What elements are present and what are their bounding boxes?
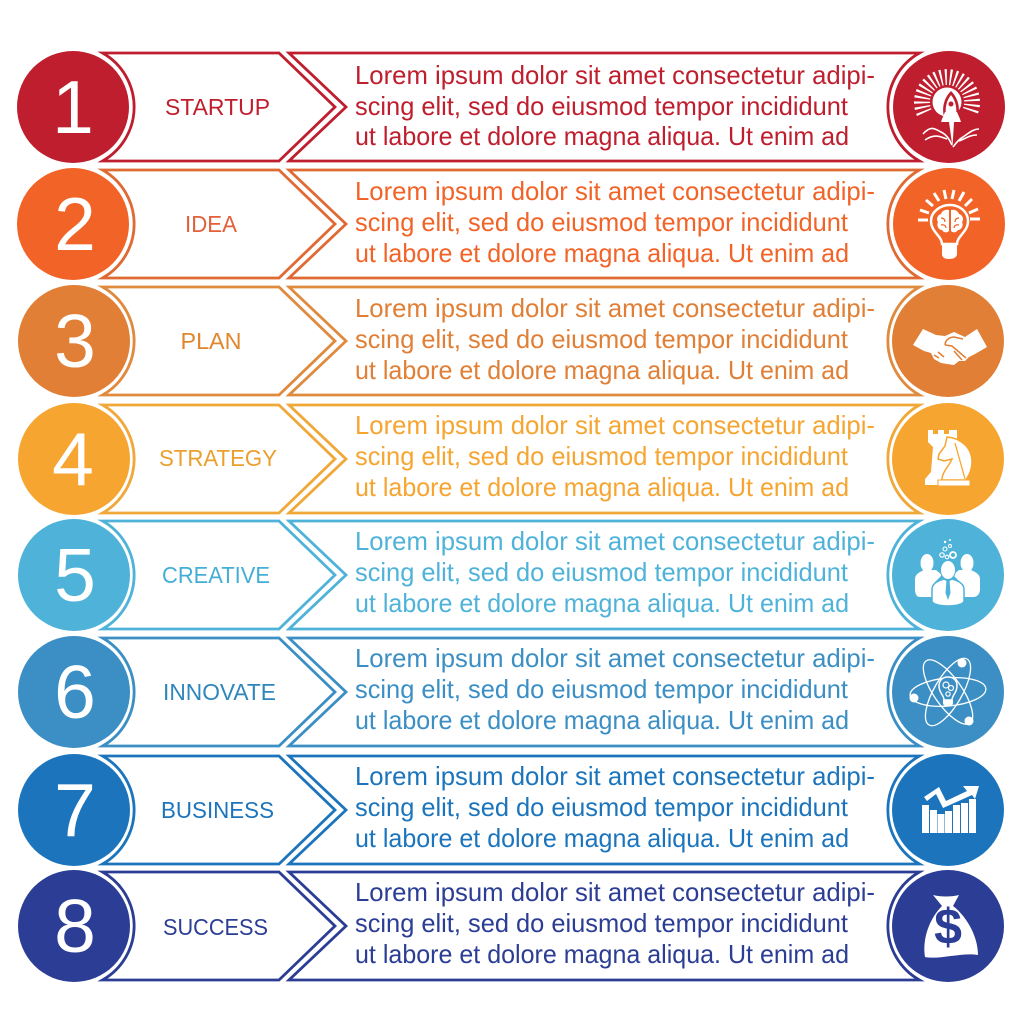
body text 5: scing elit, sed do eiusmod tempor incididunt bbox=[355, 557, 849, 587]
arrow frame: step 3 label bbox=[103, 287, 335, 395]
label: success: SUCCESS bbox=[163, 914, 268, 940]
number circle 7 bbox=[18, 754, 130, 866]
arrow frame: step 2 label bbox=[103, 170, 335, 278]
number 6: 6 bbox=[54, 650, 96, 734]
arrow frame: step 4 text bbox=[289, 405, 919, 513]
body text 7: scing elit, sed do eiusmod tempor incididunt bbox=[355, 792, 849, 822]
panel: step 3 plan bbox=[18, 285, 1004, 397]
icon circle 4 bbox=[892, 403, 1004, 515]
label: plan: PLAN bbox=[180, 328, 242, 354]
number 5: 5 bbox=[54, 533, 96, 617]
arrow frame: step 3 text bbox=[289, 287, 919, 395]
number circle 1 bbox=[17, 51, 129, 163]
arrow frame: step 8 label bbox=[103, 872, 335, 980]
body text 5: Lorem ipsum dolor sit amet consectetur adipi- bbox=[355, 526, 875, 556]
body text 1: scing elit, sed do eiusmod tempor incididunt bbox=[355, 91, 849, 121]
arrow frame: step 8 text bbox=[289, 872, 919, 980]
number 2: 2 bbox=[54, 182, 96, 266]
body text 4: ut labore et dolore magna aliqua. Ut enim ad bbox=[355, 472, 849, 502]
icon: atom with bulb bbox=[909, 652, 987, 732]
body text 4: scing elit, sed do eiusmod tempor incididunt bbox=[355, 441, 849, 471]
arrow frame: step 5 label bbox=[103, 521, 335, 629]
body text 3: ut labore et dolore magna aliqua. Ut enim ad bbox=[355, 355, 849, 385]
number circle 4 bbox=[18, 403, 130, 515]
icon circle 5 bbox=[892, 519, 1004, 631]
body text 6: ut labore et dolore magna aliqua. Ut enim ad bbox=[355, 705, 849, 735]
icon: money bag bbox=[924, 895, 978, 958]
label: creative: CREATIVE bbox=[162, 562, 270, 588]
number 7: 7 bbox=[54, 768, 96, 852]
icon circle 7 bbox=[892, 754, 1004, 866]
icon: light bulb with brain bbox=[918, 190, 980, 259]
arrow frame: step 5 text bbox=[289, 521, 919, 629]
label: idea: IDEA bbox=[185, 211, 238, 237]
panel: step 7 business bbox=[18, 754, 1004, 866]
number 4: 4 bbox=[52, 417, 94, 501]
icon circle 3 bbox=[892, 285, 1004, 397]
icon circle 1 bbox=[893, 51, 1005, 163]
arrow frame: step 4 label bbox=[103, 405, 335, 513]
arrow frame: step 1 label bbox=[103, 53, 335, 161]
body text 3: Lorem ipsum dolor sit amet consectetur adipi- bbox=[355, 293, 875, 323]
icon circle 8 bbox=[892, 870, 1004, 982]
body text 6: Lorem ipsum dolor sit amet consectetur adipi- bbox=[355, 643, 875, 673]
icon circle 6 bbox=[892, 636, 1004, 748]
body text 2: Lorem ipsum dolor sit amet consectetur adipi- bbox=[355, 176, 875, 206]
body text 2: ut labore et dolore magna aliqua. Ut enim ad bbox=[355, 238, 849, 268]
panel: step 5 creative bbox=[18, 519, 1004, 631]
icon: rocket in sun bbox=[922, 77, 979, 147]
number circle 3 bbox=[18, 285, 130, 397]
icon: money bag: $ bbox=[934, 899, 962, 955]
arrow frame: step 6 text bbox=[289, 638, 919, 746]
icon: team with gears bbox=[915, 539, 980, 606]
number circle 8 bbox=[18, 870, 130, 982]
body text 1: Lorem ipsum dolor sit amet consectetur adipi- bbox=[355, 60, 875, 90]
number circle 5 bbox=[18, 519, 130, 631]
body text 1: ut labore et dolore magna aliqua. Ut enim ad bbox=[355, 121, 849, 151]
number circle 2 bbox=[17, 168, 129, 280]
body text 7: Lorem ipsum dolor sit amet consectetur adipi- bbox=[355, 761, 875, 791]
label: strategy: STRATEGY bbox=[159, 445, 277, 471]
label: innovate: INNOVATE bbox=[163, 679, 276, 705]
arrow frame: step 6 label bbox=[103, 638, 335, 746]
panel: step 4 strategy bbox=[18, 403, 1004, 515]
panel: step 6 innovate bbox=[18, 636, 1004, 748]
arrow frame: step 2 text bbox=[289, 170, 919, 278]
panel: step 2 idea bbox=[17, 168, 1005, 280]
body text 5: ut labore et dolore magna aliqua. Ut enim ad bbox=[355, 588, 849, 618]
body text 8: scing elit, sed do eiusmod tempor incididunt bbox=[355, 908, 849, 938]
body text 7: ut labore et dolore magna aliqua. Ut enim ad bbox=[355, 823, 849, 853]
number 3: 3 bbox=[54, 299, 96, 383]
arrow frame: step 1 text bbox=[289, 53, 919, 161]
arrow frame: step 7 text bbox=[289, 756, 919, 864]
panel: step 1 startup bbox=[17, 51, 1005, 163]
body text 4: Lorem ipsum dolor sit amet consectetur adipi- bbox=[355, 410, 875, 440]
label: business: BUSINESS bbox=[161, 797, 274, 823]
body text 3: scing elit, sed do eiusmod tempor incididunt bbox=[355, 324, 849, 354]
label: startup: STARTUP bbox=[165, 94, 270, 120]
body text 8: ut labore et dolore magna aliqua. Ut enim ad bbox=[355, 939, 849, 969]
panel: step 8 success bbox=[18, 870, 1004, 982]
number 1: 1 bbox=[52, 65, 94, 149]
body text 6: scing elit, sed do eiusmod tempor incididunt bbox=[355, 674, 849, 704]
arrow frame: step 7 label bbox=[103, 756, 335, 864]
icon: chess rook and knight bbox=[925, 430, 972, 486]
number 8: 8 bbox=[54, 884, 96, 968]
icon circle 2 bbox=[893, 168, 1005, 280]
number circle 6 bbox=[18, 636, 130, 748]
icon: growth bar chart bbox=[922, 786, 979, 833]
body text 8: Lorem ipsum dolor sit amet consectetur adipi- bbox=[355, 877, 875, 907]
icon: handshake bbox=[913, 329, 987, 365]
body text 2: scing elit, sed do eiusmod tempor incididunt bbox=[355, 207, 849, 237]
